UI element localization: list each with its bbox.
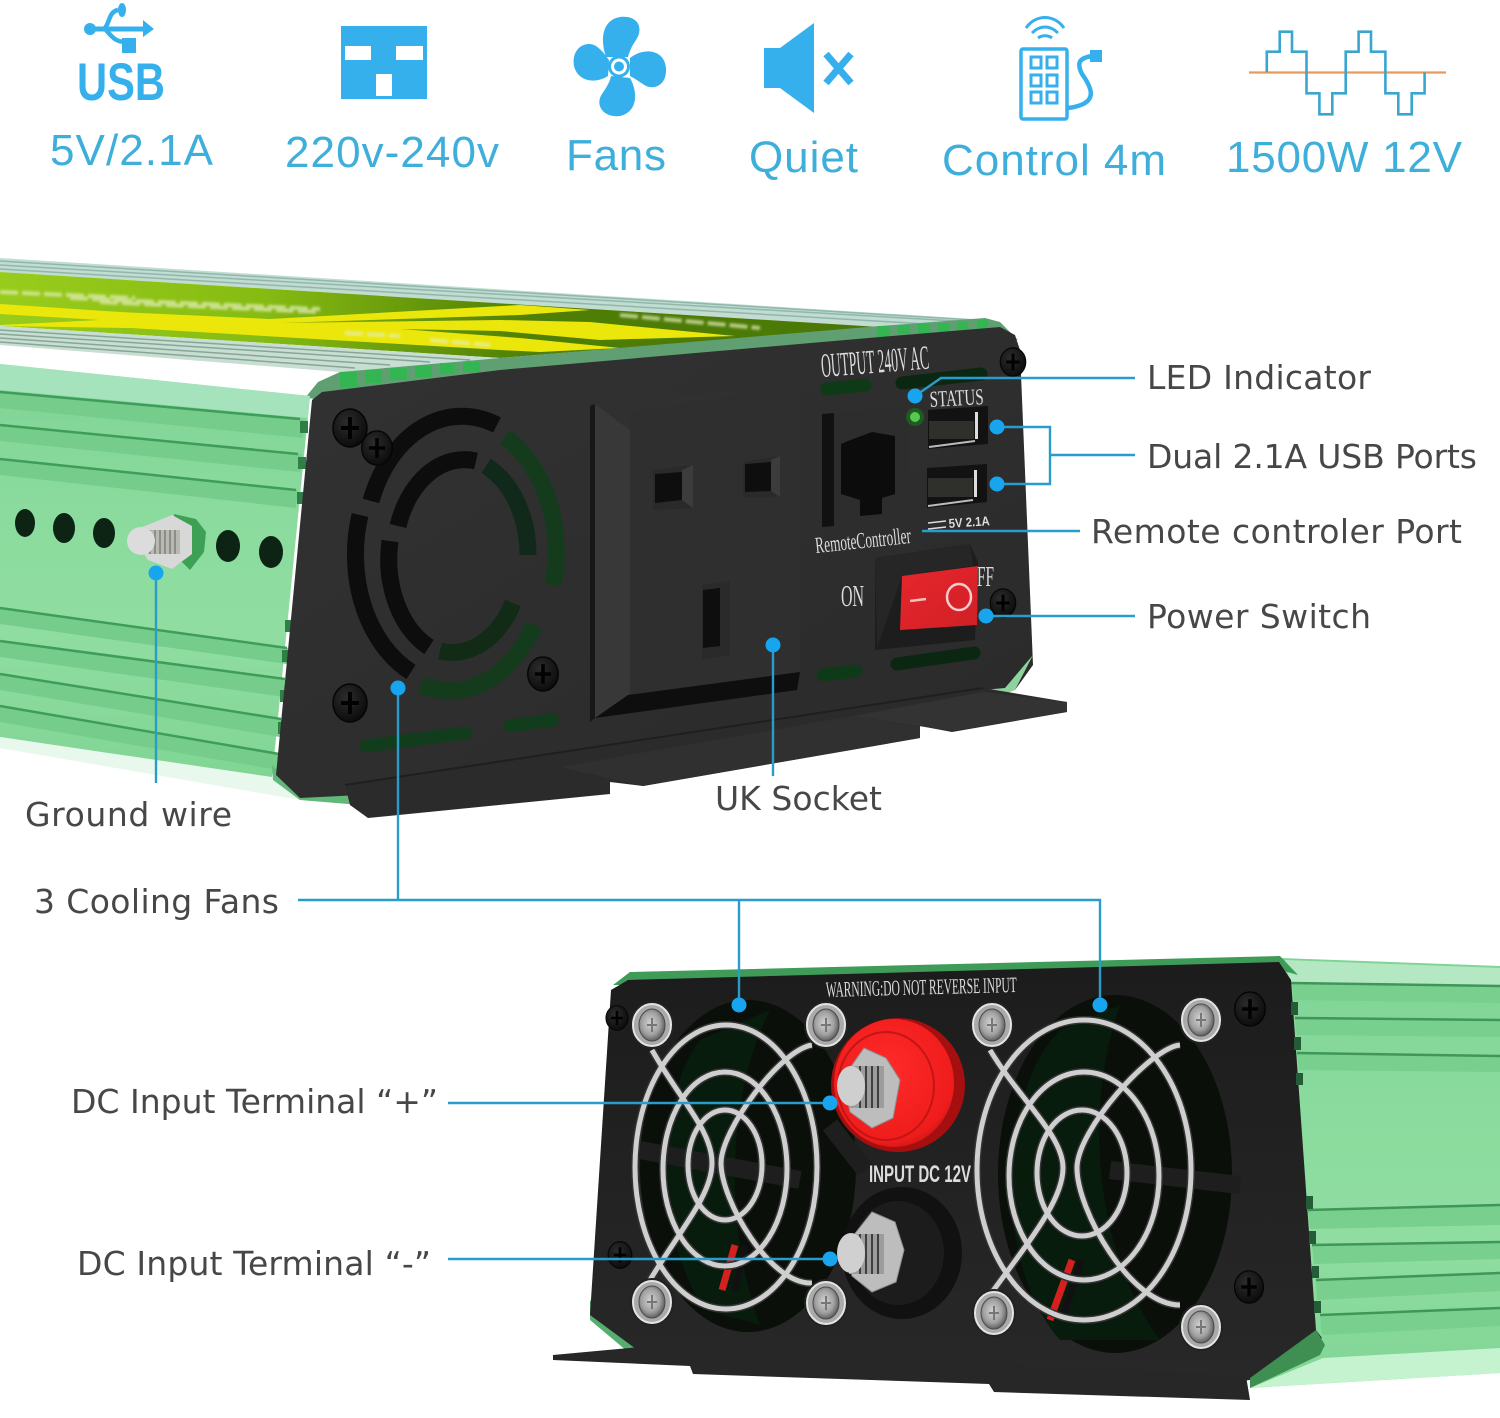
remote controller text: RemoteController [814,523,912,558]
lower inverter: DC input side [553,956,1500,1400]
feature: 220v-240v socket [285,26,499,177]
remote controller RJ port [822,407,908,527]
mounting bracket [553,1347,1250,1400]
top feature icons row [50,3,1463,185]
USB rating text: 5V 2.1A [948,513,991,531]
callout: power switch [978,597,1371,636]
inverter green side panel [0,364,360,805]
feature: USB 5V/2.1A: 5V/2.1A [50,126,214,175]
black negative terminal [837,1187,962,1319]
USB port: lower [927,464,987,508]
power switch [841,544,994,650]
feature: fans [566,17,666,180]
warning text: WARNING:DO NOT REVERSE INPUT [825,972,1017,1002]
callout: ground wire: Ground wire [25,795,232,834]
status LED [906,408,924,426]
upper inverter: AC output side: OUTPUT 240V AC [820,340,930,385]
panel screws [333,348,1026,722]
feature: quiet: Quiet [749,133,858,182]
feature: 1500W 12V waveform [1226,32,1463,182]
left fan guard [635,1025,817,1309]
callout: DC input terminal negative [77,1244,838,1283]
rear panel corner rim [1250,1330,1325,1388]
feature: quiet [749,23,858,182]
right fan guard [977,1020,1191,1320]
callout: ground wire [25,566,232,834]
callout: LED indicator [908,358,1371,404]
silver guard bolts [630,996,1223,1351]
inverter top surface with label [0,258,1018,400]
rear panel [590,962,1322,1382]
fan housings [640,995,1240,1353]
callout: remote controller port: Remote controler Port [1091,512,1462,551]
USB rating text [928,513,991,531]
feature: 1500W 12V waveform: 1500W 12V [1226,133,1463,182]
inverter green body, right end [590,956,1500,1388]
feature: 220v-240v socket: 220v-240v [285,128,499,177]
feature: control 4m [942,18,1166,185]
side notches [1291,1002,1321,1313]
callout: UK socket: UK Socket [715,779,882,818]
feature: control 4m: Control 4m [942,136,1166,185]
inverter front panel [276,327,1033,798]
status text: STATUS [929,384,984,412]
callout: power switch: Power Switch [1147,597,1371,636]
UK socket [590,385,800,722]
black panel screws [606,992,1265,1303]
input text: INPUT DC 12V [869,1161,971,1188]
feature: USB 5V/2.1A: USB [77,53,165,112]
callout: 3 cooling fans: 3 Cooling Fans [34,882,279,921]
feature: USB 5V/2.1A [50,3,214,175]
callout: DC input terminal positive: DC Input Terminal “+” [71,1082,438,1121]
USB port: upper [928,406,988,449]
callout: UK socket [715,638,882,818]
callout: dual USB ports: Dual 2.1A USB Ports [1147,437,1477,476]
power switch: FF [977,562,994,593]
callout: dual USB ports [990,420,1477,492]
vent strips [366,374,981,746]
feature: fans: Fans [566,131,666,180]
mounting feet [345,688,1067,818]
upper inverter: AC output side [0,258,1067,818]
callout: LED indicator: LED Indicator [1147,358,1371,397]
red positive terminal [831,1018,965,1152]
callout: DC input terminal positive [71,1082,838,1121]
cooling fan vent slots [355,416,556,691]
callout: DC input terminal negative: DC Input Terminal “-” [77,1244,431,1283]
power switch: ON [841,578,864,613]
callout: 3 cooling fans [34,680,1108,1012]
